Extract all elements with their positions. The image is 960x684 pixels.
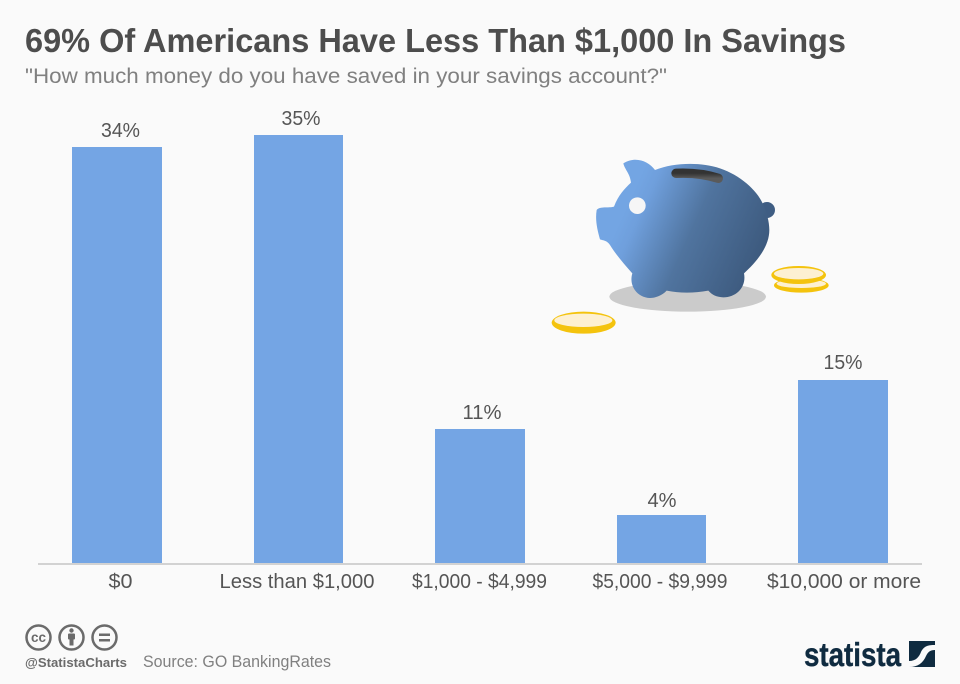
bar: $0 <box>72 120 162 593</box>
bar: less than $1,000: 35% <box>282 108 321 130</box>
bar: $0: 34% <box>101 120 140 142</box>
title: 69% Of Americans Have Less Than $1,000 In Savings <box>25 22 846 59</box>
source: Source: GO BankingRates <box>143 653 331 671</box>
bar: $5,000-$9,999 <box>592 490 728 593</box>
icon: piggy bank with coins <box>552 160 829 334</box>
bar: $1,000-$4,999 <box>412 402 547 593</box>
icon: cc: cc <box>31 629 46 645</box>
bar: $1,000-$4,999: 11% <box>462 402 502 424</box>
pig tail <box>759 202 775 218</box>
logo mark <box>909 641 935 667</box>
bar: $5,000-$9,999: 4% <box>648 490 677 512</box>
icon: attribution person <box>60 626 84 650</box>
pig shadow <box>609 282 766 312</box>
coin stack <box>771 266 829 293</box>
bar: $10,000 or more: $10,000 or more <box>767 571 921 593</box>
bar chart <box>38 108 922 593</box>
bar: $10,000 or more <box>767 352 921 593</box>
coin on floor <box>552 312 616 334</box>
bar: less than $1,000 <box>220 108 374 593</box>
pig eye <box>629 197 646 214</box>
handle: @StatistaCharts <box>25 655 127 670</box>
logo wordmark: statista <box>804 636 902 673</box>
bar: $1,000-$4,999: $1,000 - $4,999 <box>412 571 547 593</box>
icons: creative commons <box>26 626 116 650</box>
bar: $0: $0 <box>108 571 132 593</box>
pig body <box>596 160 769 298</box>
bar: $10,000 or more: 15% <box>824 352 863 374</box>
bar: less than $1,000: Less than $1,000 <box>220 571 374 593</box>
subtitle: "How much money do you have saved in your savings account?" <box>25 64 667 88</box>
icon: no derivatives <box>92 626 116 650</box>
bar: $5,000-$9,999: $5,000 - $9,999 <box>592 571 728 593</box>
pig coin slot <box>676 173 718 178</box>
statista logo <box>804 636 935 673</box>
